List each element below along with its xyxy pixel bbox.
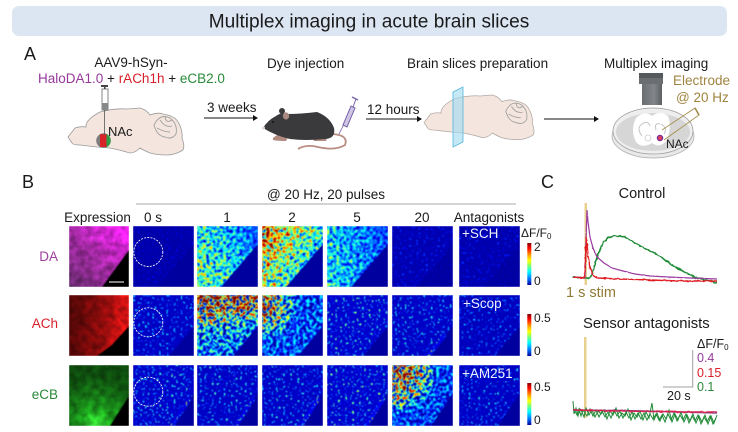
antagonist chart: [573, 316, 729, 424]
eCB color bar: [527, 380, 551, 427]
green trace: [573, 401, 717, 424]
column headers: Antagonists: [454, 210, 525, 225]
scale values: 0.15: [697, 366, 721, 380]
step 1 heading: viral constructs: [38, 55, 225, 86]
column headers: 1: [223, 210, 231, 225]
row labels: DA: [39, 249, 58, 264]
eCB 20 s: [392, 365, 453, 426]
expression images: [69, 226, 129, 426]
color scales: [521, 226, 552, 427]
DA 2 s: [262, 226, 323, 287]
control chart: [566, 186, 717, 301]
eCB row heat maps: [133, 365, 520, 426]
column headers: 0 s: [144, 210, 162, 225]
eCB 2 s: [262, 365, 323, 426]
panel A: workflow: [24, 44, 730, 158]
panel B: heat maps: [22, 172, 552, 427]
imaging setup: [612, 73, 730, 158]
panel letter B: B: [22, 172, 34, 192]
scale values: ΔF/F: [697, 337, 724, 351]
scale values: 0: [724, 343, 729, 352]
label +SCH: +SCH: [462, 226, 498, 241]
scale values: [697, 337, 729, 394]
stimulus bar: [584, 203, 587, 285]
DA color bar: 0: [534, 274, 541, 288]
arrow: 12 hours: 12 hours: [367, 102, 420, 117]
stimulus label: 1 s stim: [566, 285, 616, 301]
label +AM251: +AM251: [462, 366, 513, 381]
label NAc: NAc: [108, 124, 133, 139]
column headers: 20: [414, 210, 430, 225]
DA row heat maps: [133, 226, 520, 287]
DA 5 s: [327, 226, 388, 287]
eCB expression: [69, 365, 129, 426]
panel C: traces: [541, 172, 729, 424]
scale values: 0.1: [697, 380, 714, 394]
red trace: [573, 410, 717, 412]
title bar: Multiplex imaging in acute brain slices: [209, 12, 529, 32]
microscope objective: [639, 73, 663, 105]
petri dish: [612, 108, 694, 158]
electrode label: @ 20 Hz: [676, 90, 729, 105]
row labels: [32, 249, 58, 402]
red trace: [573, 237, 717, 281]
arrow to imaging: [544, 116, 599, 122]
ACh 20 s: [392, 295, 453, 356]
column headers: Expression: [64, 210, 131, 225]
step 4 heading: Multiplex imaging: [604, 56, 708, 71]
stimulus heading: @ 20 Hz, 20 pulses: [267, 187, 385, 202]
brain with slicing plane: [424, 87, 534, 147]
step 1 heading: viral constructs: AAV9-hSyn-: [94, 55, 168, 70]
panel letter C: C: [541, 172, 554, 192]
axis label: ΔF/F: [521, 226, 547, 240]
syringe: [339, 97, 358, 134]
arrow: 3 weeks: 3 weeks: [207, 100, 257, 115]
DA 0 s: [133, 226, 194, 287]
eCB 1 s: [197, 365, 258, 426]
stimulation ROI circle: [134, 308, 163, 337]
arrow: 3 weeks: [204, 100, 258, 121]
ACh color bar: 0.5: [534, 311, 551, 325]
eCB color bar: 0: [534, 413, 541, 427]
column headers: 2: [288, 210, 296, 225]
antagonist title: Sensor antagonists: [583, 316, 710, 332]
stimulation ROI circle: [134, 238, 163, 266]
ACh row heat maps: [133, 295, 520, 356]
ACh 5 s: [327, 295, 388, 356]
electrode: [662, 108, 699, 140]
scale values: 0.4: [697, 351, 714, 365]
ACh 0 s: [133, 295, 194, 356]
NAc injection site: [96, 133, 111, 148]
electrode label: [673, 73, 730, 105]
label +Scop: +Scop: [463, 296, 502, 311]
column headers: [64, 210, 525, 225]
control title: Control: [619, 186, 665, 202]
scale bars: [663, 350, 693, 403]
step 1 heading: viral constructs: HaloDA1.0 + rACh1h + eCB2.0: [38, 71, 225, 86]
green trace: [573, 236, 717, 283]
axis label: 0: [547, 232, 552, 241]
eCB antagonist: [459, 365, 520, 426]
purple trace: [573, 210, 717, 279]
ACh color bar: 0: [534, 344, 541, 358]
step 2 heading: Dye injection: [267, 56, 344, 71]
stimulus bar: [584, 337, 586, 418]
label NAc: NAc: [666, 137, 689, 151]
brain sagittal with injection: [68, 85, 184, 155]
panel letter A: A: [24, 44, 36, 64]
column headers: 5: [353, 210, 361, 225]
ACh expression: [69, 295, 129, 356]
ACh 2 s: [262, 295, 323, 356]
eCB 0 s: [133, 365, 194, 426]
syringe: [101, 85, 108, 135]
scale bars: 20 s: [667, 389, 691, 403]
ACh 1 s: [197, 295, 258, 356]
eCB 5 s: [327, 365, 388, 426]
row labels: ACh: [32, 316, 58, 331]
ACh antagonist: [459, 295, 520, 356]
electrode label: Electrode: [673, 73, 730, 88]
DA 20 s: [392, 226, 453, 287]
DA color bar: 2: [534, 240, 541, 254]
title bar: [12, 6, 727, 36]
mouse with syringe: [262, 97, 358, 149]
ACh color bar: [527, 311, 551, 358]
DA color bar: [527, 240, 541, 288]
eCB color bar: 0.5: [534, 380, 551, 394]
row labels: eCB: [32, 387, 58, 402]
DA expression: [69, 226, 129, 287]
purple trace: [573, 410, 717, 413]
DA antagonist: [459, 226, 520, 287]
stimulation ROI circle: [134, 377, 163, 406]
step 3 heading: Brain slices preparation: [407, 56, 548, 71]
DA 1 s: [197, 226, 258, 287]
